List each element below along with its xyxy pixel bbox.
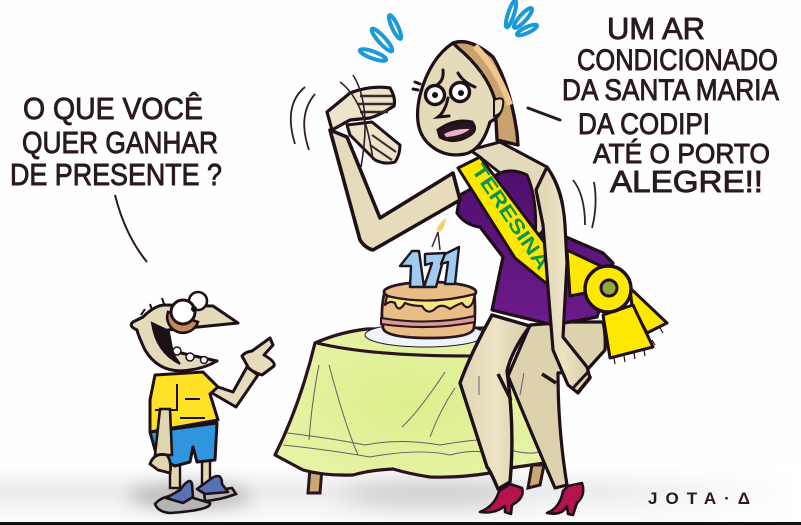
signature: JOTA·Δ — [648, 489, 750, 508]
back leg — [508, 322, 605, 488]
speech pointer: woman — [528, 108, 560, 120]
dress — [457, 170, 613, 325]
speech text: woman: DA CODIPI — [578, 108, 710, 141]
hair — [141, 298, 164, 315]
glasses and eyes — [426, 86, 444, 104]
head — [131, 305, 238, 371]
speech pointer: boy — [115, 195, 147, 262]
sweat drops — [359, 0, 538, 63]
raised arm — [330, 130, 460, 250]
dangling arm — [155, 409, 172, 455]
cake — [365, 218, 485, 347]
mouth — [152, 323, 180, 364]
woman — [327, 42, 667, 515]
face — [418, 43, 502, 155]
speech text: boy: O QUE VOCÊ — [23, 91, 203, 126]
speech text: boy: DE PRESENTE ? — [10, 157, 222, 192]
left arm — [536, 167, 590, 393]
motion lines — [291, 87, 596, 228]
ear — [494, 98, 503, 116]
front leg — [460, 315, 530, 489]
teeth — [173, 347, 208, 364]
hair — [453, 42, 518, 145]
icing — [385, 294, 475, 312]
candle 171 — [400, 247, 459, 287]
boy — [131, 292, 274, 513]
rosette — [585, 266, 631, 312]
ribbons — [630, 288, 667, 333]
speech text: woman: ALEGRE!! — [610, 164, 763, 199]
neck and torso — [470, 142, 563, 240]
hand lower — [347, 122, 400, 163]
tablecloth — [275, 328, 545, 477]
soles — [155, 496, 210, 513]
eyebrows and nose — [413, 70, 475, 117]
sash — [458, 157, 550, 284]
eyes — [167, 312, 198, 333]
speech text: woman — [562, 11, 779, 199]
shoes — [480, 484, 523, 514]
speech text: boy: QUER GANHAR — [22, 125, 218, 160]
shirt — [150, 372, 218, 432]
speech text: woman: UM AR — [607, 11, 705, 46]
sash text: TERESINA — [467, 160, 553, 274]
shoes — [166, 481, 193, 503]
table — [275, 328, 545, 493]
legs — [170, 460, 210, 488]
cake body — [382, 290, 475, 338]
shorts — [150, 423, 217, 466]
yellow sash back — [567, 250, 603, 296]
speech text: woman: ATÉ O PORTO — [593, 138, 770, 169]
speech text: boy — [10, 91, 222, 192]
candle wick and flame — [432, 232, 440, 250]
table legs — [308, 468, 322, 493]
plate — [365, 323, 485, 347]
pointing arm — [212, 367, 258, 407]
hand motion lines — [340, 75, 373, 167]
pointing hand — [242, 338, 274, 375]
ground shadow — [0, 465, 801, 525]
cake top — [384, 282, 476, 302]
hand upper — [327, 87, 394, 130]
mouth — [438, 121, 475, 141]
